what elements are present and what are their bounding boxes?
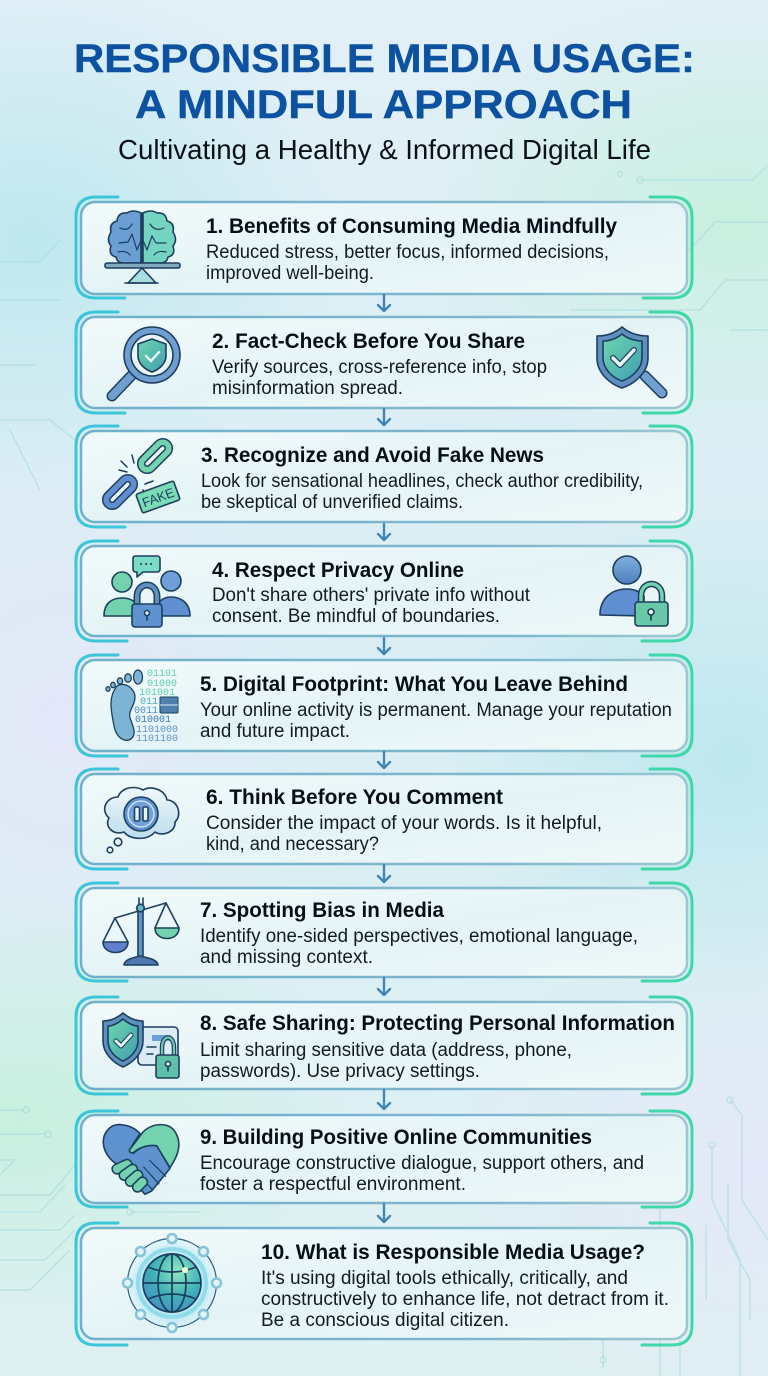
icon: broken chain with fake tag xyxy=(104,440,180,513)
icon: footprint and binary: 101001 xyxy=(139,688,175,699)
text block: and future impact. xyxy=(200,721,350,742)
text block xyxy=(200,1153,644,1195)
text block xyxy=(200,1040,572,1082)
text block: foster a respectful environment. xyxy=(200,1174,466,1195)
text block: Limit sharing sensitive data (address, phone, xyxy=(200,1040,572,1061)
arrow xyxy=(378,524,390,540)
icon: heart handshake xyxy=(103,1125,179,1194)
text block: constructively to enhance life, not detract from it. xyxy=(261,1289,669,1310)
icon: two people with lock xyxy=(104,556,190,627)
text block: Don't share others' private info without xyxy=(212,585,531,606)
icon: broken chain with fake tag: FAKE xyxy=(140,485,177,510)
heading: 3. Recognize and Avoid Fake News xyxy=(201,443,544,467)
panel: 7 bias xyxy=(76,883,692,981)
panel: 3 fake news xyxy=(76,426,692,527)
arrow xyxy=(378,1090,390,1109)
arrow xyxy=(378,295,390,311)
title xyxy=(74,37,695,127)
panel: 8 safe sharing xyxy=(76,997,692,1094)
icon: footprint and binary: 011 xyxy=(140,697,158,708)
text block: and missing context. xyxy=(200,947,373,968)
panel: 4 privacy xyxy=(76,541,692,641)
text block: Look for sensational headlines, check author credibility, xyxy=(201,471,643,492)
arrow xyxy=(378,409,390,425)
icon: footprint and binary: 01101 xyxy=(147,669,177,680)
icon: magnifier with shield xyxy=(112,327,180,396)
icon: footprint and binary: 010001 xyxy=(135,715,171,726)
text block: Encourage constructive dialogue, support others, and xyxy=(200,1153,644,1174)
text block: Verify sources, cross-reference info, stop xyxy=(212,357,547,378)
text block xyxy=(200,926,638,968)
text block: improved well-being. xyxy=(206,263,374,284)
text block xyxy=(212,585,531,627)
text block: Identify one-sided perspectives, emotional language, xyxy=(200,926,638,947)
text block xyxy=(206,242,609,284)
heading: 8. Safe Sharing: Protecting Personal Information xyxy=(200,1011,675,1035)
icon: person with lock xyxy=(600,556,668,626)
text block: Reduced stress, better focus, informed decisions, xyxy=(206,242,609,263)
text block: Be a conscious digital citizen. xyxy=(261,1310,509,1331)
icon: balance scale xyxy=(103,898,179,965)
panel: 6 think xyxy=(76,769,692,869)
text block: misinformation spread. xyxy=(212,378,403,399)
heading: 2. Fact-Check Before You Share xyxy=(212,329,525,353)
text block: consent. Be mindful of boundaries. xyxy=(212,606,500,627)
text block xyxy=(212,357,547,399)
text block xyxy=(206,813,602,855)
panel: 10 responsible media usage xyxy=(76,1223,692,1345)
panel: 1 benefits xyxy=(76,197,692,298)
panel: 2 fact-check xyxy=(76,312,692,413)
icon: thought cloud with pause xyxy=(105,788,179,853)
text block: kind, and necessary? xyxy=(206,834,379,855)
heading: 1. Benefits of Consuming Media Mindfully xyxy=(206,214,617,238)
panel: 9 communities xyxy=(76,1111,692,1207)
text block xyxy=(200,700,672,742)
heading: 9. Building Positive Online Communities xyxy=(200,1125,592,1149)
icon: footprint and binary xyxy=(106,669,178,745)
icon: shield, card, lock xyxy=(103,1013,179,1078)
title: A MINDFUL APPROACH xyxy=(135,83,632,127)
icon: footprint and binary: 01000 xyxy=(147,679,177,690)
arrow xyxy=(378,1204,390,1222)
text block xyxy=(201,471,643,513)
text block: be skeptical of unverified claims. xyxy=(201,492,463,513)
icon: glowing globe xyxy=(123,1234,221,1332)
heading: 4. Respect Privacy Online xyxy=(212,558,464,582)
text block: Consider the impact of your words. Is it helpful, xyxy=(206,813,602,834)
icon: footprint and binary: 0011 xyxy=(134,706,158,717)
title: RESPONSIBLE MEDIA USAGE: xyxy=(74,37,695,81)
arrow xyxy=(378,865,390,882)
text block xyxy=(261,1268,669,1331)
panel: 5 digital footprint xyxy=(76,655,692,756)
arrow xyxy=(378,978,390,995)
heading: 7. Spotting Bias in Media xyxy=(200,898,445,922)
subtitle: Cultivating a Healthy & Informed Digital Life xyxy=(118,134,651,165)
heading: 10. What is Responsible Media Usage? xyxy=(261,1240,645,1264)
arrow xyxy=(378,638,390,654)
text block: passwords). Use privacy settings. xyxy=(200,1061,480,1082)
text block: It's using digital tools ethically, critically, and xyxy=(261,1268,628,1289)
heading: 5. Digital Footprint: What You Leave Behind xyxy=(200,672,628,696)
text block: Your online activity is permanent. Manage your reputation xyxy=(200,700,672,721)
icon: footprint and binary: 1101100 xyxy=(136,734,178,745)
arrow xyxy=(378,752,390,768)
icon: shield with magnifier xyxy=(597,327,662,393)
icon: footprint and binary: 1101000 xyxy=(136,725,178,736)
heading: 6. Think Before You Comment xyxy=(206,785,503,809)
icon: brain on balance xyxy=(105,211,180,283)
